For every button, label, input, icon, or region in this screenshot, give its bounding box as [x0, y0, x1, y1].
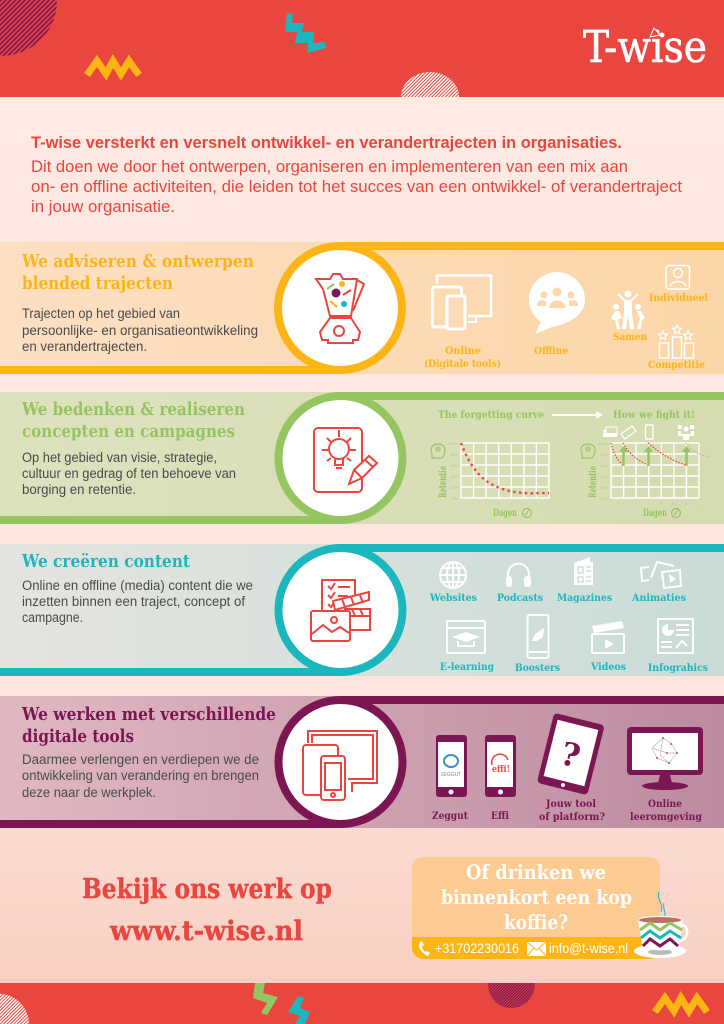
contact heading: Of drinken we [466, 860, 606, 884]
icon: devices [432, 276, 491, 329]
icon: magazine [574, 557, 593, 585]
chart: how we fight it: 100% [598, 441, 609, 446]
chart: how we fight it: 0% [602, 496, 608, 501]
icon labels: Videos [590, 662, 626, 673]
body text: inzetten binnen een traject, concept of [22, 594, 245, 609]
chart titles with arrow: How we fight it! [613, 410, 695, 421]
body text [22, 578, 253, 625]
chart: the forgetting curve: 2 [485, 501, 488, 506]
icon labels [424, 293, 708, 371]
icon labels: Magazines [557, 593, 612, 604]
body text: borging en retentie. [22, 482, 136, 497]
chart: the forgetting curve: Retentie [438, 466, 449, 498]
icon: phone with rocket [528, 615, 548, 658]
decoration: teal zigzag [288, 996, 310, 1024]
icon: speech bubble [529, 272, 585, 334]
icon labels: Animaties [631, 593, 686, 604]
icon labels: Online [648, 799, 682, 810]
decoration: purple hatched circle [0, 0, 57, 56]
icon labels: Samen [613, 332, 648, 343]
icon: headphones [506, 564, 531, 587]
icon labels: leeromgeving [630, 812, 702, 823]
chart: how we fight it: 80% [600, 452, 608, 457]
body text [22, 450, 236, 497]
chart: how we fight it: 5 [672, 501, 675, 506]
panel: bedenken en realiseren [0, 392, 724, 524]
body text: Online en offline (media) content die we [22, 578, 253, 593]
chart: how we fight it: 60% [600, 463, 608, 468]
icon: tablet with question mark [537, 713, 605, 795]
panel: content [0, 544, 724, 676]
chart: how we fight it: 40% [600, 474, 608, 479]
icon: Effi phone: effi! [492, 765, 510, 775]
decoration: purple hatched semicircle [488, 983, 535, 1008]
icon: Zeggut phone [436, 735, 467, 797]
icon: Effi phone [485, 735, 516, 797]
decoration: teal zigzag [285, 13, 326, 53]
icon labels: Online [445, 346, 481, 357]
body text: deze naar de werkplek. [22, 785, 156, 800]
header banner [0, 0, 724, 97]
body text: cultuur en gedrag of ten behoeve van [22, 466, 236, 481]
body text: persoonlijke- en organisatieontwikkeling [22, 323, 258, 338]
chart: the forgetting curve: 0% [452, 496, 458, 501]
panel: digitale tools [0, 696, 724, 828]
icon: video clapper [592, 621, 624, 653]
chart: the forgetting curve: 7 [547, 501, 550, 506]
icon labels: Zeggut [432, 811, 468, 822]
contact box [412, 857, 660, 959]
icon labels [429, 593, 708, 674]
icon labels: Competitie [648, 360, 705, 371]
body text: Op het gebied van visie, strategie, [22, 450, 217, 465]
heading: We adviseren & ontwerpen [21, 251, 254, 272]
body text: ontwikkeling van verandering en brengen [22, 768, 259, 783]
icon labels: (Digitale tools) [424, 359, 501, 370]
heading: We bedenken & realiseren [21, 399, 245, 420]
chart: how we fight it: 4 [660, 501, 663, 506]
heading: We creëren content [21, 551, 191, 572]
icon: checklist, clapperboard and image [311, 580, 370, 641]
chart: how we fight it: 1 [622, 501, 625, 506]
body text [22, 752, 259, 800]
icon: infographic [658, 619, 693, 653]
chart: how we fight it: 7 [697, 501, 700, 506]
contact details: +31702230016 [435, 940, 519, 956]
decoration: yellow zigzag [87, 61, 139, 75]
icon labels: Podcasts [497, 593, 543, 604]
intro text: Dit doen we door het ontwerpen, organiseren en implementeren van een mix aan [31, 157, 628, 176]
icon: e-learning [447, 621, 485, 653]
icon labels: Jouw tool [545, 799, 596, 810]
contact heading: koffie? [504, 910, 568, 934]
contact heading [441, 860, 632, 934]
chart: how we fight it: 3 [647, 501, 650, 506]
chart: how we fight it: 6 [685, 501, 688, 506]
icons above chart [603, 425, 694, 440]
footer banner [0, 983, 724, 1024]
intro text: in jouw organisatie. [31, 197, 175, 216]
chart: how we fight it: Retentie [588, 466, 599, 498]
icon labels: Infograhics [648, 663, 708, 674]
body text: Trajecten op het gebied van [22, 306, 180, 321]
contact details: info@t-wise.nl [549, 940, 628, 956]
icon labels: of platform? [539, 812, 605, 823]
heading [21, 251, 254, 294]
heading: We werken met verschillende [21, 704, 276, 725]
body text: en verandertrajecten. [22, 339, 147, 354]
chart: the forgetting curve: 1 [472, 501, 475, 506]
icon: idea on paper with pencil [314, 428, 377, 492]
icon labels [432, 799, 702, 823]
icon: group of people [611, 290, 645, 329]
call to action: website: www.t-wise.nl [109, 916, 303, 947]
icon: coffee cup [634, 892, 687, 958]
call to action: website: Bekijk ons werk op [82, 874, 332, 905]
chart: the forgetting curve: 5 [522, 501, 525, 506]
intro text [31, 133, 682, 216]
intro text: T-wise versterkt en versnelt ontwikkel- en verandertrajecten in organisaties. [31, 133, 622, 152]
heading: blended trajecten [22, 273, 173, 294]
body text: Daarmee verlengen en verdiepen we de [22, 752, 259, 767]
decoration: white hatched semicircle [401, 72, 459, 97]
icon labels: E-learning [440, 662, 494, 673]
icon: blender [316, 274, 364, 343]
decoration: yellow zigzag [655, 998, 707, 1012]
chart: the forgetting curve: 6 [535, 501, 538, 506]
heading: digitale tools [22, 726, 134, 747]
chart: the forgetting curve: 4 [510, 501, 513, 506]
contact details [419, 940, 628, 956]
icon: monitor with network [627, 727, 703, 790]
icon labels: Boosters [515, 663, 560, 674]
chart: the forgetting curve: 20% [450, 485, 458, 490]
icon: individual [666, 266, 690, 289]
call to action: website [82, 874, 332, 947]
body text [22, 306, 258, 354]
panel: adviseren en ontwerpen [0, 242, 724, 374]
icon: animation frames [641, 562, 681, 588]
icon labels: Websites [429, 593, 477, 604]
chart: the forgetting curve [431, 441, 550, 519]
logo: T-wise: T-wise [583, 22, 707, 73]
contact heading: binnenkort een kop [441, 885, 632, 909]
chart: the forgetting curve: 60% [450, 463, 458, 468]
chart titles with arrow: The forgetting curve [438, 410, 544, 421]
chart: how we fight it: Dagen [643, 508, 667, 519]
icon labels: Effi [491, 811, 509, 822]
chart: the forgetting curve: 3 [497, 501, 500, 506]
decoration: white hatched circle [0, 994, 29, 1024]
heading [21, 704, 276, 747]
chart: the forgetting curve: 40% [450, 474, 458, 479]
chart: the forgetting curve: 100% [448, 441, 459, 446]
icon: Zeggut phone: ZEGGUT [441, 772, 461, 778]
intro text: on- en offline activiteiten, die leiden tot het succes van een ontwikkel- of verandertraject [31, 177, 682, 196]
icon: red devices [303, 731, 377, 800]
decoration: green zigzag [253, 983, 278, 1015]
icon: globe [440, 562, 466, 588]
chart: how we fight it [581, 425, 710, 519]
icon: podium with stars [658, 325, 694, 358]
chart titles with arrow [438, 410, 695, 421]
chart: the forgetting curve: Dagen [493, 508, 517, 519]
icon labels: Individueel [649, 293, 708, 304]
heading [21, 399, 245, 442]
chart: the forgetting curve: 80% [450, 452, 458, 457]
body text: campagne. [22, 610, 83, 625]
chart: how we fight it: 20% [600, 485, 608, 490]
icon: tablet with question mark: ? [557, 734, 584, 776]
heading: concepten en campagnes [22, 421, 235, 442]
icon labels: Offline [534, 346, 568, 357]
chart: how we fight it: 2 [635, 501, 638, 506]
